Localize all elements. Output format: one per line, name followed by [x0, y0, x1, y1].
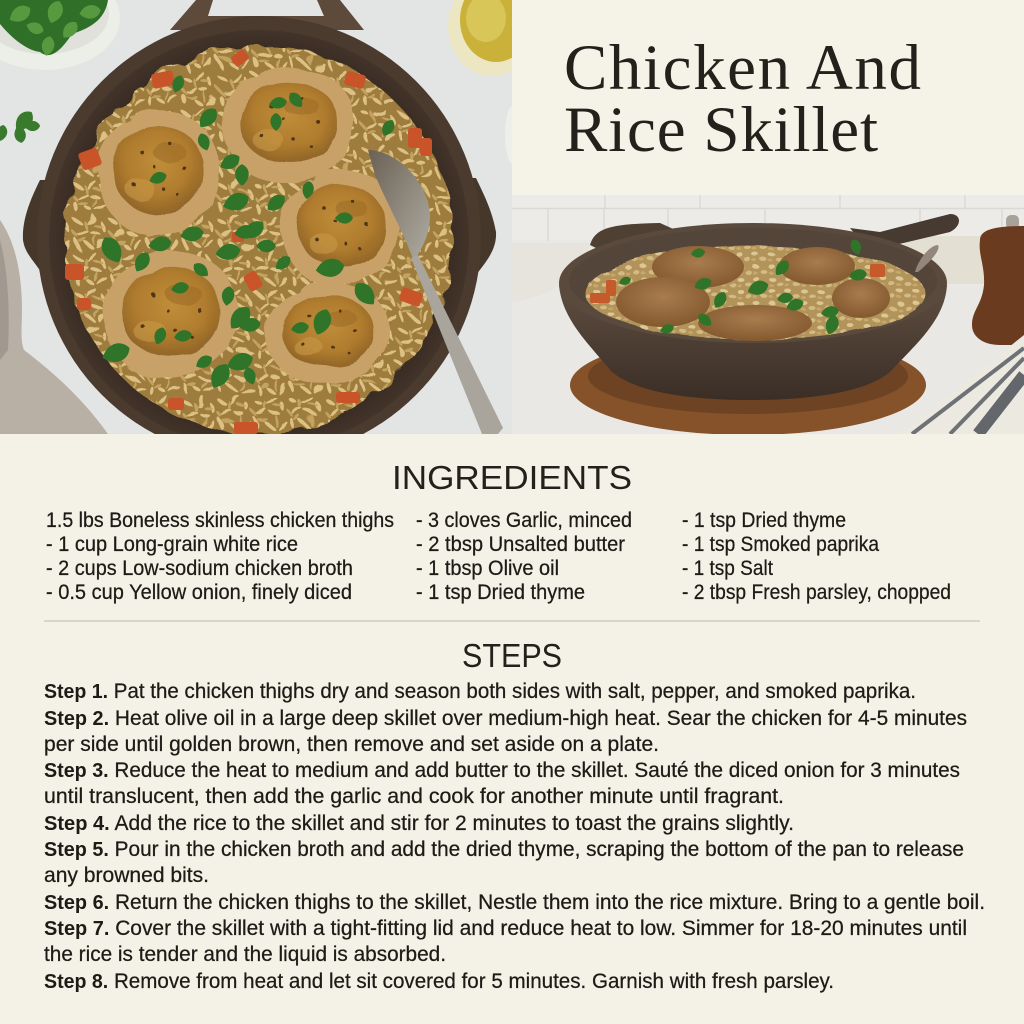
- rice filling: [585, 246, 925, 340]
- icon: glass of olive oil: [448, 0, 512, 76]
- tiled wall: [512, 195, 1024, 241]
- rice filling: [65, 46, 453, 434]
- skillet rim: [559, 223, 947, 343]
- steps text block: Step 6. Return the chicken thighs to the skillet, Nestle them into the rice mixture. Bring to a gentle boil.: [44, 891, 985, 914]
- herb garnish: [97, 74, 397, 392]
- steps text block: Step 2. Heat olive oil in a large deep skillet over medium-high heat. Sear the chicken for 4-5 minutes: [44, 707, 967, 730]
- ingredients column 3: - 1 tsp Smoked paprika: [682, 533, 879, 556]
- icon: parsley sprig: [0, 112, 40, 143]
- steps text block: Step 1. Pat the chicken thighs dry and season both sides with salt, pepper, and smoked paprika.: [44, 680, 916, 703]
- steps text block: the rice is tender and the liquid is absorbed.: [44, 943, 446, 966]
- heading: recipe title: Chicken And: [564, 32, 921, 104]
- steps text block: any browned bits.: [44, 864, 209, 887]
- heading: recipe title: [564, 32, 921, 166]
- wooden board: [570, 358, 926, 434]
- pepper grinder: [972, 215, 1024, 345]
- ingredients column 2: - 3 cloves Garlic, minced: [416, 509, 632, 532]
- ingredients column 1: [46, 509, 394, 604]
- marble counter: [512, 283, 1024, 434]
- heading: steps: STEPS: [462, 637, 562, 674]
- icon: bowl of chopped parsley: [0, 0, 120, 70]
- ingredients column 2: - 1 tbsp Olive oil: [416, 557, 559, 580]
- skillet body: [23, 0, 496, 460]
- steps text block: Step 5. Pour in the chicken broth and add the dried thyme, scraping the bottom of the pan to release: [44, 838, 964, 861]
- ingredients column 1: - 2 cups Low-sodium chicken broth: [46, 557, 353, 580]
- cream cloth: [900, 236, 985, 284]
- chicken thighs: [616, 246, 890, 341]
- ingredients column 1: 1.5 lbs Boneless skinless chicken thighs: [46, 509, 394, 532]
- skillet handles: [590, 214, 959, 250]
- icon: small dish edge: [505, 106, 512, 164]
- ingredients column 2: - 1 tsp Dried thyme: [416, 581, 585, 604]
- carrots: [590, 264, 885, 303]
- heading: recipe title: Rice Skillet: [564, 94, 878, 166]
- steps text block: Step 4. Add the rice to the skillet and stir for 2 minutes to toast the grains slightly.: [44, 812, 794, 835]
- white plate: [512, 243, 590, 302]
- ingredients column 3: - 1 tsp Dried thyme: [682, 509, 846, 532]
- ingredients column 1: - 1 cup Long-grain white rice: [46, 533, 298, 556]
- panel: title: [512, 0, 1024, 195]
- serving spoon: [915, 245, 938, 272]
- herb garnish: [618, 238, 868, 336]
- chicken thighs: [98, 67, 399, 384]
- steps text block: per side until golden brown, then remove and set aside on a plate.: [44, 733, 659, 756]
- ingredients column 3: - 1 tsp Salt: [682, 557, 773, 580]
- linen towel: [0, 220, 108, 434]
- steps text block: until translucent, then add the garlic and cook for another minute until fragrant.: [44, 785, 784, 808]
- skillet body: [559, 285, 947, 400]
- ingredients column 2: [416, 509, 632, 604]
- ingredients column 2: - 2 tbsp Unsalted butter: [416, 533, 625, 556]
- photo: overhead chicken and rice skillet: [0, 0, 536, 460]
- ingredients column 3: [682, 509, 951, 604]
- steps text block: Step 8. Remove from heat and let sit covered for 5 minutes. Garnish with fresh parsley.: [44, 970, 834, 993]
- carrots and peas: [65, 48, 432, 434]
- heading: ingredients: INGREDIENTS: [392, 459, 632, 496]
- steps text block: [44, 680, 985, 993]
- steps text block: Step 3. Reduce the heat to medium and add butter to the skillet. Sauté the diced onion for 3 minutes: [44, 759, 960, 782]
- steps text block: Step 7. Cover the skillet with a tight-fitting lid and reduce heat to low. Simmer for 18-20 minutes until: [44, 917, 967, 940]
- striped towel: [900, 335, 1024, 434]
- ingredients column 3: - 2 tbsp Fresh parsley, chopped: [682, 581, 951, 604]
- spoon: [368, 150, 503, 434]
- ingredients column 1: - 0.5 cup Yellow onion, finely diced: [46, 581, 352, 604]
- photo: side view of skillet: [512, 195, 1024, 435]
